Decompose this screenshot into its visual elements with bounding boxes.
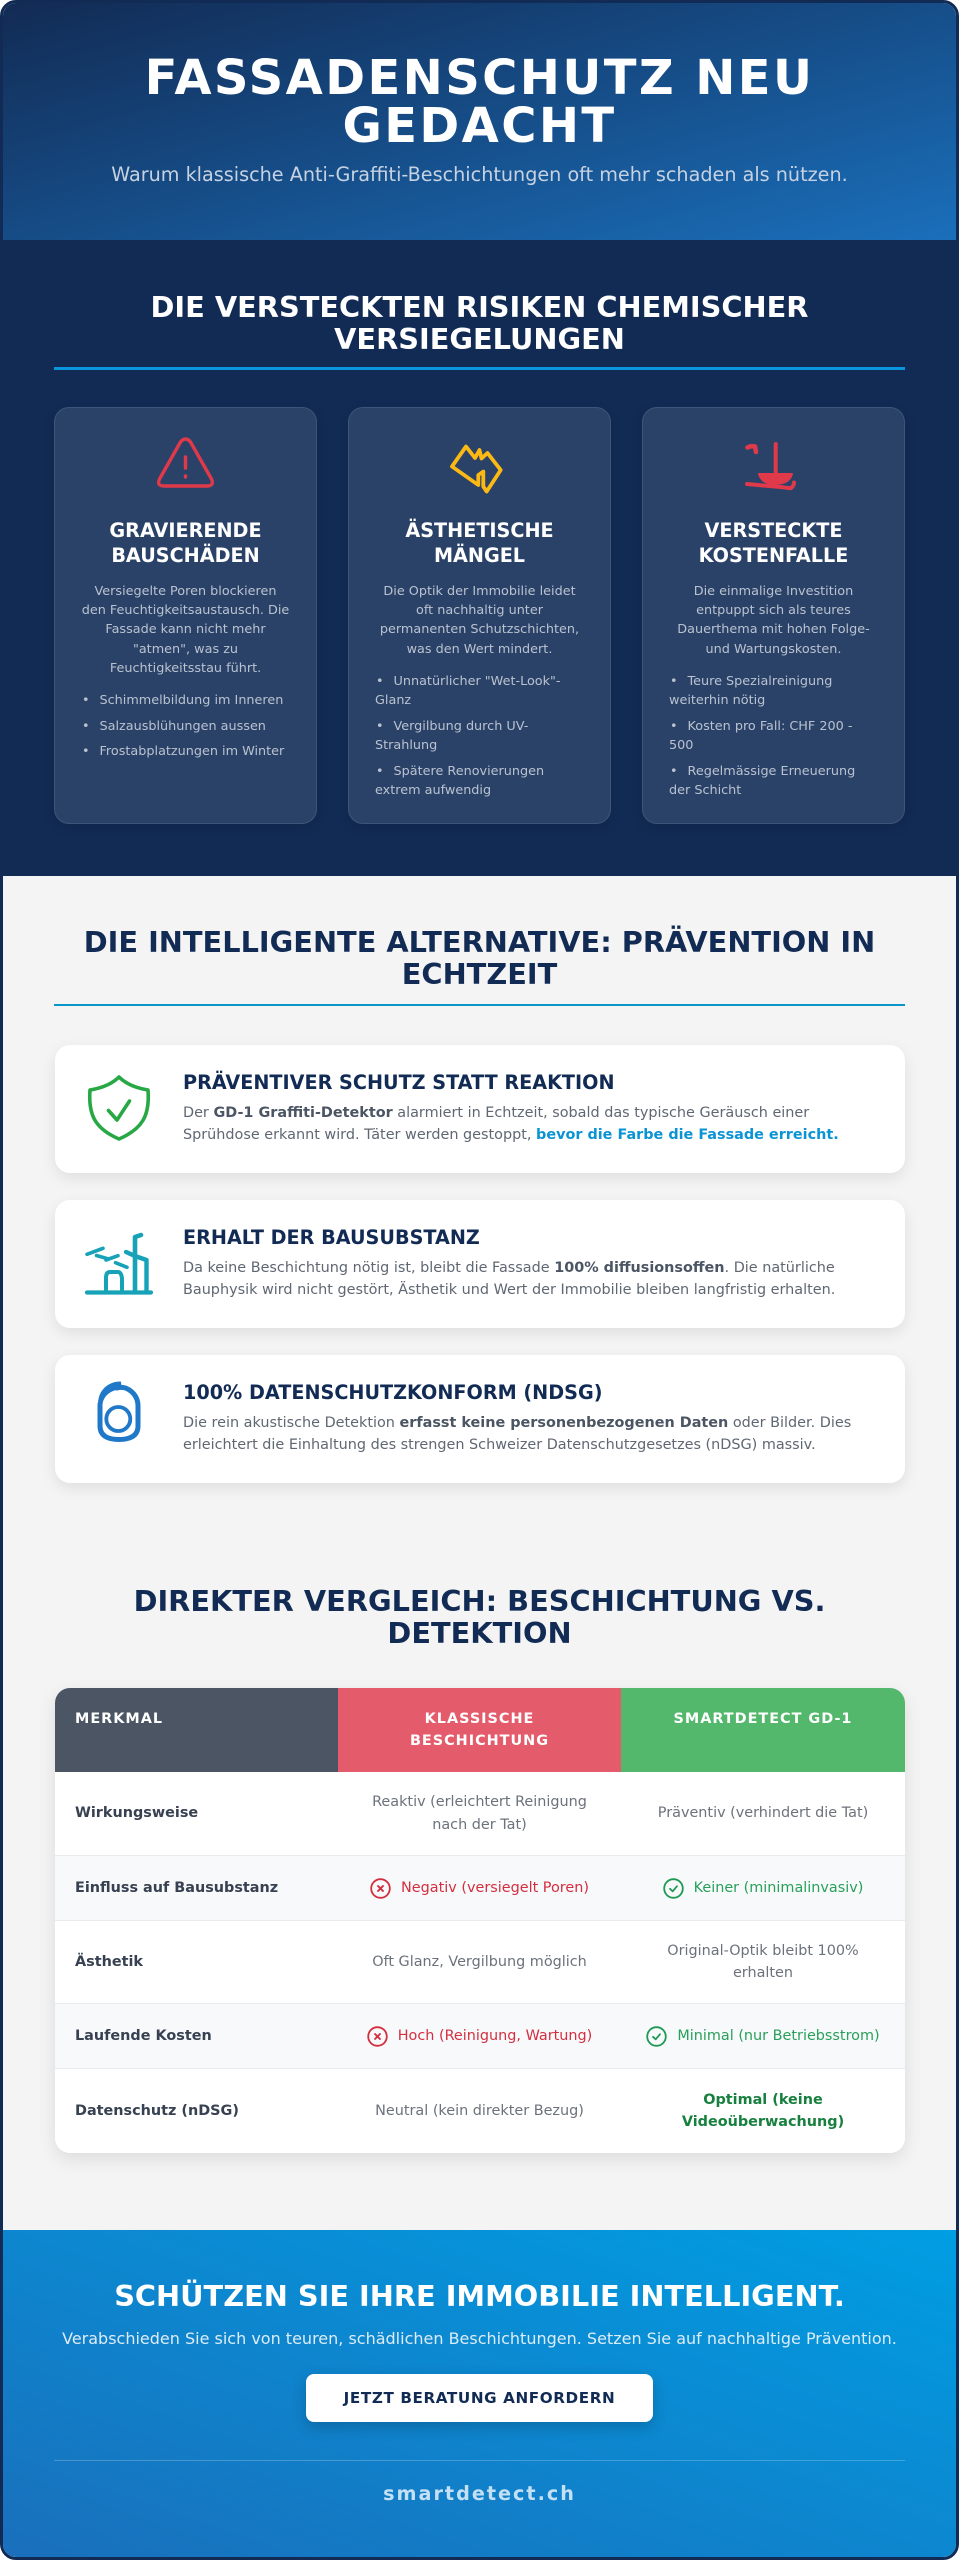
alternative heading: ECHTZEIT bbox=[402, 957, 557, 991]
card text: permanenten Schutzschichten, bbox=[380, 622, 579, 637]
risks heading: VERSIEGELUNGEN bbox=[334, 322, 625, 356]
benefit text: Bauphysik wird nicht gestört, Ästhetik und Wert der Immobilie bleiben langfristig erhalten. bbox=[183, 1282, 835, 1298]
card heading: BAUSCHÄDEN bbox=[111, 544, 260, 567]
bullet list: Spätere Renovierungen bbox=[394, 764, 544, 779]
card heading: KOSTENFALLE bbox=[699, 544, 848, 567]
benefit text: Sprühdose erkannt wird. Täter werden gestoppt, bevor die Farbe die Fassade erreicht. bbox=[183, 1127, 839, 1143]
row 2 coating bbox=[370, 1878, 589, 1899]
bullet list: weiterhin nötig bbox=[669, 693, 765, 708]
row 4 coating: Hoch (Reinigung, Wartung) bbox=[398, 2028, 592, 2044]
bullet list: Salzausblühungen aussen bbox=[100, 719, 266, 734]
call to action panel bbox=[3, 2230, 956, 2560]
table header: coating: BESCHICHTUNG bbox=[410, 1733, 549, 1749]
row 2 smartdetect bbox=[663, 1878, 863, 1899]
card text: "atmen", was zu bbox=[133, 642, 238, 657]
title: GEDACHT bbox=[342, 98, 617, 154]
row 5 smartdetect: Videoüberwachung) bbox=[682, 2114, 844, 2130]
comparison table bbox=[55, 1688, 905, 2153]
bullet list bbox=[375, 674, 561, 798]
title bbox=[145, 50, 814, 154]
benefit text: Die rein akustische Detektion erfasst keine personenbezogenen Daten oder Bilder. Dies bbox=[183, 1415, 851, 1431]
benefit text bbox=[183, 1260, 835, 1298]
card heading bbox=[699, 519, 848, 567]
cta text: Verabschieden Sie sich von teuren, schädlichen Beschichtungen. Setzen Sie auf nachhaltige Prävention. bbox=[62, 2329, 897, 2348]
comparison heading: DIREKTER VERGLEICH: BESCHICHTUNG VS. bbox=[134, 1584, 825, 1618]
icon: red cost symbol bbox=[745, 442, 796, 490]
card heading: GRAVIERENDE bbox=[109, 519, 262, 542]
card: aesthetic flaws bbox=[348, 407, 611, 824]
bullet list: 500 bbox=[669, 738, 693, 753]
benefit text: erleichtert die Einhaltung des strengen Schweizer Datenschutzgesetzes (nDSG) massiv. bbox=[183, 1437, 816, 1453]
card text bbox=[677, 584, 870, 657]
row backgrounds bbox=[55, 2003, 905, 2069]
card: cost trap bbox=[642, 407, 905, 824]
bullet list: Schimmelbildung im Inneren bbox=[100, 693, 283, 708]
row 1 coating bbox=[372, 1794, 587, 1832]
card heading bbox=[109, 519, 262, 567]
row 3 smartdetect bbox=[667, 1943, 859, 1981]
row 5 label: Datenschutz (nDSG) bbox=[75, 2103, 239, 2119]
table header: coating: KLASSISCHE bbox=[425, 1711, 534, 1727]
card heading: ÄSTHETISCHE bbox=[405, 519, 554, 542]
header panel bbox=[3, 3, 956, 240]
benefit: data protection bbox=[55, 1355, 905, 1483]
bullet list: der Schicht bbox=[669, 783, 741, 798]
benefit title: ERHALT DER BAUSUBSTANZ bbox=[183, 1226, 480, 1249]
table header: smartdetect: SMARTDETECT GD-1 bbox=[674, 1711, 852, 1727]
bullet list bbox=[669, 674, 855, 798]
cta button: JETZT BERATUNG ANFORDERN bbox=[344, 2389, 615, 2407]
benefit title: PRÄVENTIVER SCHUTZ STATT REAKTION bbox=[183, 1071, 615, 1094]
row 2 smartdetect: Keiner (minimalinvasiv) bbox=[694, 1880, 863, 1896]
card text: Die einmalige Investition bbox=[694, 584, 853, 599]
row 1 label: Wirkungsweise bbox=[75, 1805, 198, 1821]
card text: was den Wert mindert. bbox=[407, 642, 552, 657]
benefit text: Der GD-1 Graffiti-Detektor alarmiert in Echtzeit, sobald das typische Geräusch einer bbox=[183, 1105, 809, 1121]
bullet list: Glanz bbox=[375, 693, 411, 708]
risks heading bbox=[151, 290, 808, 356]
card text: Feuchtigkeitsstau führt. bbox=[110, 661, 261, 676]
subtitle: Warum klassische Anti-Graffiti-Beschichtungen oft mehr schaden als nützen. bbox=[111, 163, 848, 186]
table header: feature: MERKMAL bbox=[75, 1711, 163, 1727]
bullet list bbox=[84, 693, 284, 759]
row 4 coating bbox=[367, 2026, 592, 2047]
benefit title: 100% DATENSCHUTZKONFORM (NDSG) bbox=[183, 1381, 602, 1404]
row 3 smartdetect: erhalten bbox=[733, 1965, 793, 1981]
card text: Fassade kann nicht mehr bbox=[105, 622, 266, 637]
row 5 smartdetect: Optimal (keine bbox=[703, 2092, 823, 2108]
panel: hidden risks bbox=[3, 240, 956, 876]
row 4 label: Laufende Kosten bbox=[75, 2028, 212, 2044]
comparison heading bbox=[134, 1584, 825, 1650]
risks heading: DIE VERSTECKTEN RISIKEN CHEMISCHER bbox=[151, 290, 808, 324]
row 3 coating: Oft Glanz, Vergilbung möglich bbox=[372, 1954, 587, 1970]
alternative heading bbox=[84, 925, 875, 991]
benefit: preventive protection bbox=[55, 1045, 905, 1173]
footer divider bbox=[54, 2460, 905, 2461]
cta heading: SCHÜTZEN SIE IHRE IMMOBILIE INTELLIGENT. bbox=[114, 2279, 845, 2313]
card heading: VERSTECKTE bbox=[705, 519, 842, 542]
card heading: MÄNGEL bbox=[434, 544, 525, 567]
card text bbox=[82, 584, 289, 676]
row 3 smartdetect: Original-Optik bleibt 100% bbox=[667, 1943, 859, 1959]
bullet list: Frostabplatzungen im Winter bbox=[100, 744, 284, 759]
footer url: smartdetect.ch bbox=[383, 2482, 576, 2505]
row backgrounds bbox=[55, 1855, 905, 1921]
bullet list: Teure Spezialreinigung bbox=[688, 674, 832, 689]
benefit text: Da keine Beschichtung nötig ist, bleibt die Fassade 100% diffusionsoffen. Die natürliche bbox=[183, 1260, 835, 1276]
alternative heading: DIE INTELLIGENTE ALTERNATIVE: PRÄVENTION IN bbox=[84, 925, 875, 959]
table header: feature bbox=[55, 1688, 338, 1772]
comparison heading: DETEKTION bbox=[387, 1616, 572, 1650]
bullet list: Vergilbung durch UV- bbox=[394, 719, 528, 734]
row 1 smartdetect: Präventiv (verhindert die Tat) bbox=[658, 1805, 868, 1821]
bullet list: extrem aufwendig bbox=[375, 783, 491, 798]
card text bbox=[380, 584, 579, 657]
row 4 smartdetect: Minimal (nur Betriebsstrom) bbox=[677, 2028, 880, 2044]
card text: Die Optik der Immobilie leidet bbox=[383, 584, 576, 599]
benefit: building substance bbox=[55, 1200, 905, 1328]
card: structural damage bbox=[54, 407, 317, 824]
table header: coating bbox=[338, 1688, 621, 1772]
card text: Versiegelte Poren blockieren bbox=[95, 584, 276, 599]
row 3 label: Ästhetik bbox=[75, 1954, 143, 1970]
row 2 coating: Negativ (versiegelt Poren) bbox=[401, 1880, 589, 1896]
table header: smartdetect bbox=[621, 1688, 905, 1772]
card heading bbox=[405, 518, 554, 567]
icon: building bbox=[84, 1232, 154, 1295]
bullet list: Strahlung bbox=[375, 738, 437, 753]
card text: entpuppt sich als teures bbox=[696, 603, 851, 618]
bullet list: Kosten pro Fall: CHF 200 - bbox=[688, 719, 852, 734]
cta button bbox=[306, 2374, 653, 2422]
bullet list: Unnatürlicher "Wet-Look"- bbox=[394, 674, 561, 689]
icon: warning triangle bbox=[157, 437, 214, 488]
icon: yellow bolt bbox=[450, 444, 503, 494]
row 5 smartdetect bbox=[682, 2092, 844, 2130]
card text: den Feuchtigkeitsaustausch. Die bbox=[82, 603, 289, 618]
card text: oft nachhaltig unter bbox=[416, 603, 543, 618]
bullet list: Regelmässige Erneuerung bbox=[688, 764, 855, 779]
benefit text bbox=[183, 1415, 851, 1453]
row 5 coating: Neutral (kein direkter Bezug) bbox=[375, 2103, 584, 2119]
row 1 coating: Reaktiv (erleichtert Reinigung bbox=[372, 1794, 587, 1810]
row 4 smartdetect bbox=[646, 2026, 880, 2047]
title: FASSADENSCHUTZ NEU bbox=[145, 50, 814, 106]
icon: privacy sensor bbox=[98, 1382, 140, 1442]
icon: shield check bbox=[88, 1075, 150, 1141]
card text: und Wartungskosten. bbox=[706, 642, 841, 657]
row 2 label: Einfluss auf Bausubstanz bbox=[75, 1880, 278, 1896]
card text: Dauerthema mit hohen Folge- bbox=[677, 622, 870, 637]
row 1 coating: nach der Tat) bbox=[432, 1816, 527, 1832]
benefit text bbox=[183, 1105, 839, 1143]
